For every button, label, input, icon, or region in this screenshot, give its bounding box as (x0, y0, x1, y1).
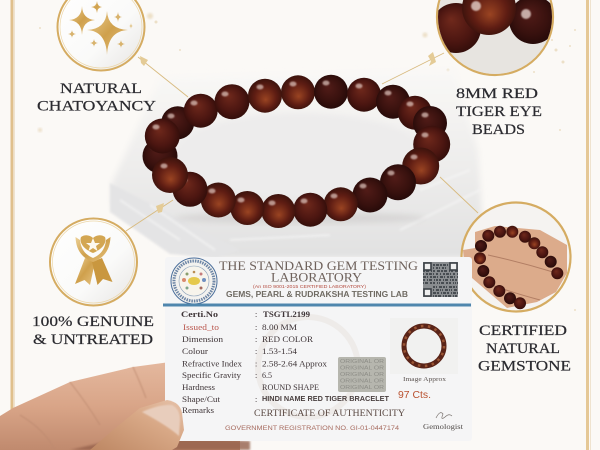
field labels: Refractive Index (182, 360, 242, 368)
heading: 8mm red tiger eye beads: 8MM RED (456, 86, 538, 102)
lab title: THE STANDARD GEM TESTING (219, 258, 418, 273)
hologram seal (338, 357, 386, 392)
heading: natural chatoyancy: NATURAL (60, 81, 142, 97)
field values: : (255, 335, 257, 344)
field values: 8.00 MM (262, 323, 297, 332)
field values: : (255, 310, 257, 319)
lab title: (An ISO 9001-2015 CERTIFIED LABORATORY) (253, 284, 367, 289)
image caption: Image Approx (403, 376, 447, 383)
government registration: GOVERNMENT REGISTRATION NO. GI-01-0447174 (225, 426, 400, 432)
heading: 8mm red tiger eye beads: TIGER EYE (456, 104, 542, 120)
heading: certified natural gemstone: GEMSTONE (478, 358, 571, 374)
leader line: genuine (126, 200, 173, 231)
hologram seal: ORIGINAL OR (340, 372, 384, 378)
carat weight: 97 Cts. (398, 390, 431, 401)
field labels: Remarks (182, 406, 214, 415)
marble slab (110, 70, 482, 258)
bracelet (142, 75, 450, 228)
hologram seal: ORIGINAL OR (340, 385, 384, 391)
photo: close-up of beads (431, 0, 557, 76)
field labels: Specific Gravity (182, 371, 241, 380)
heading: natural chatoyancy (37, 81, 156, 114)
field values: 2.58-2.64 Approx (262, 360, 327, 368)
leader line: beads (382, 52, 444, 84)
field labels: Colour (182, 347, 208, 356)
heading: certified natural gemstone: CERTIFIED (479, 323, 567, 339)
heading: certified natural gemstone: NATURAL (486, 341, 560, 357)
field values: : (255, 360, 257, 368)
field labels: Shape/Cut (182, 395, 221, 404)
field values: : (255, 395, 257, 404)
field values: 1.53-1.54 (262, 347, 297, 356)
heading: 100% genuine and untreated (32, 314, 154, 348)
field values: TSGTL2199 (263, 310, 310, 319)
hologram seal: ORIGINAL OR (340, 359, 384, 365)
lab title: LABORATORY (271, 270, 363, 284)
icon: gold ribbon badge (50, 218, 137, 306)
lab title (219, 258, 418, 299)
field labels: Hardness (182, 383, 215, 392)
field labels: Dimension (182, 335, 223, 344)
hologram seal: ORIGINAL OR (340, 366, 384, 372)
field values (254, 310, 405, 419)
card watermark (258, 317, 358, 417)
field values: 6.5 (262, 371, 272, 380)
field values: : (255, 323, 257, 332)
heading: certified natural gemstone (478, 323, 571, 374)
photo: bracelet in hand (462, 202, 570, 312)
field values: HINDI NAME RED TIGER BRACELET (262, 396, 390, 403)
gold specks (38, 13, 576, 331)
leader line: chatoyancy (138, 56, 188, 97)
hand: thumb (90, 400, 184, 450)
hologram seal: ORIGINAL OR (340, 378, 384, 384)
gemologist signature (423, 413, 464, 431)
lab logo (171, 258, 217, 304)
gemologist signature: Gemologist (423, 422, 464, 431)
certificate bracelet image (390, 318, 458, 374)
field values: RED COLOR (262, 335, 314, 344)
QR code (423, 262, 458, 297)
heading: natural chatoyancy: CHATOYANCY (37, 98, 156, 114)
field labels (181, 310, 242, 415)
leader line: certified (440, 177, 478, 213)
heading: 8mm red tiger eye beads (456, 86, 542, 138)
heading: 8mm red tiger eye beads: BEADS (472, 122, 525, 138)
certificate card (163, 257, 472, 441)
field labels: Certi.No (181, 310, 218, 319)
field labels: Issued_to (183, 323, 219, 332)
heading: 100% genuine and untreated: & UNTREATED (33, 332, 153, 348)
lab title: GEMS, PEARL & RUDRAKSHA TESTING LAB (226, 290, 408, 299)
field values: ROUND SHAPE (262, 383, 319, 392)
field values: : (255, 347, 257, 356)
field values: CERTIFICATE OF AUTHENTICITY (254, 409, 405, 419)
hand: index finger (0, 362, 250, 450)
icon: sparkles in gold ring (58, 0, 144, 70)
heading: 100% genuine and untreated: 100% GENUINE (32, 314, 154, 330)
blue divider (163, 304, 471, 306)
field values: : (255, 371, 257, 380)
